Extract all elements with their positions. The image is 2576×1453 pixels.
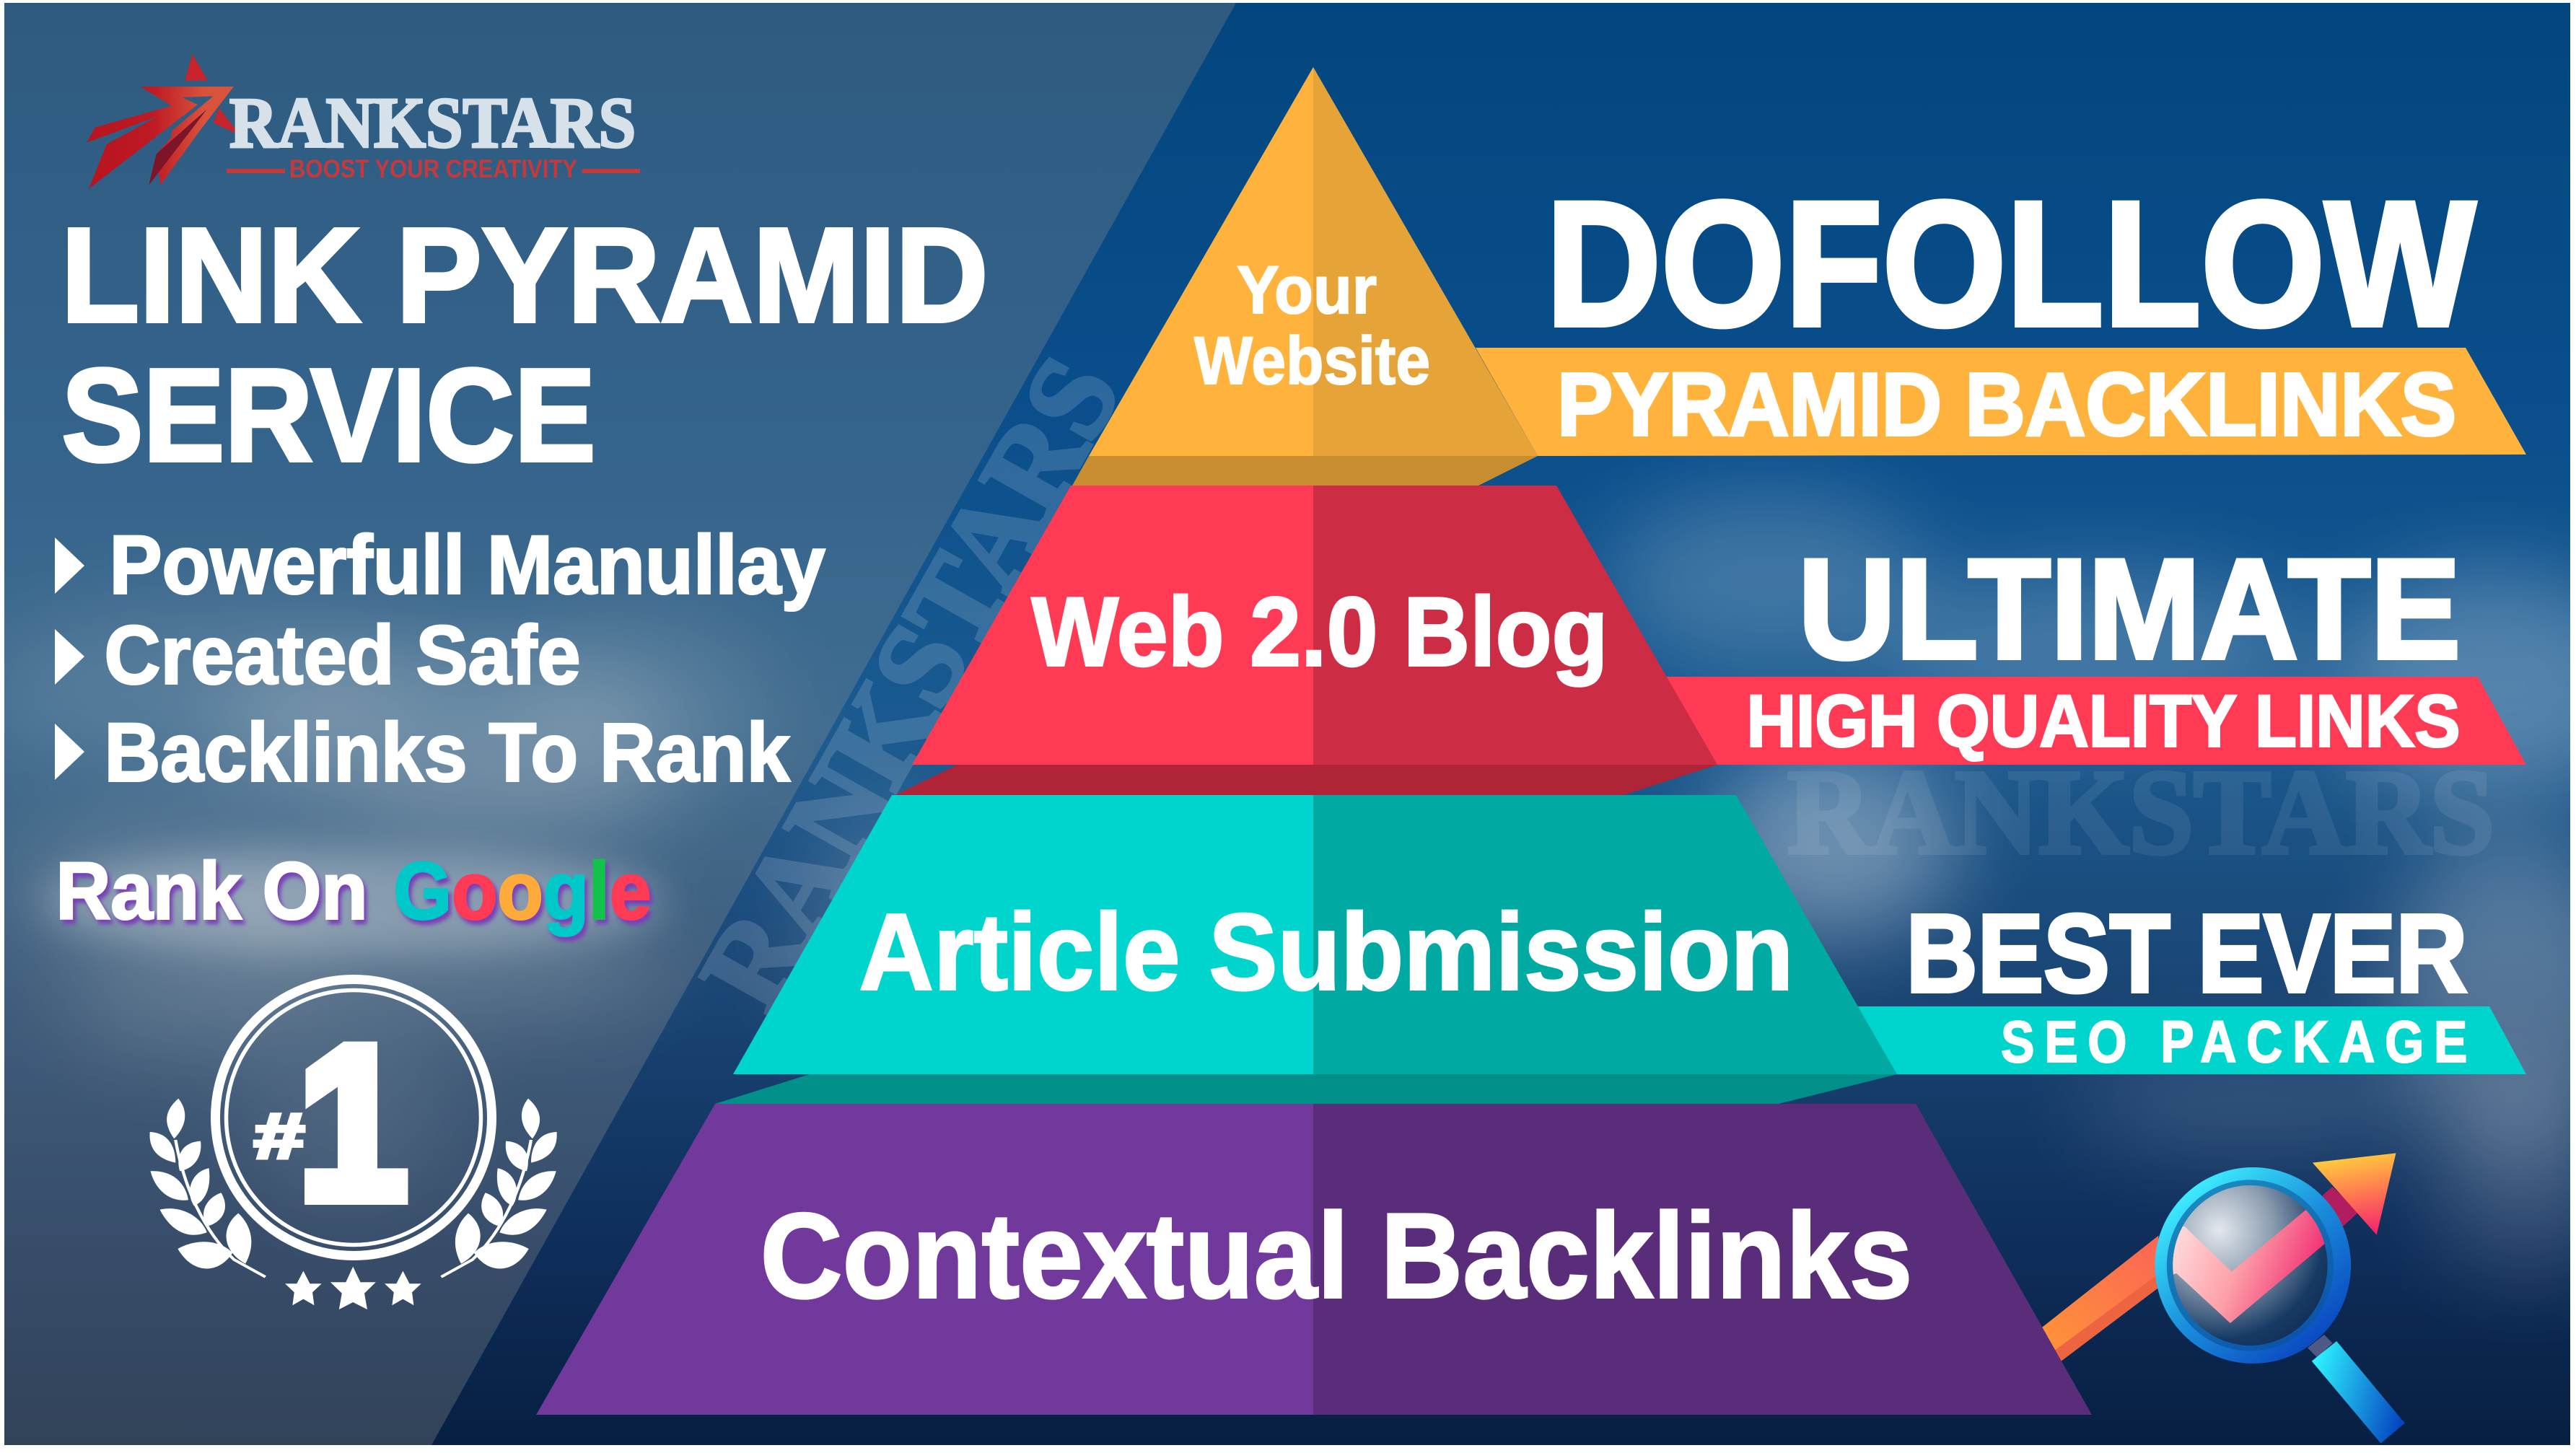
pyramid [536, 67, 2092, 1415]
tier 2: Web 2.0 Blog: Web 2.0 Blog [1032, 577, 1608, 687]
title: Link Pyramid Service: SERVICE [62, 341, 596, 489]
bullet: Created Safe: Created Safe [104, 609, 580, 701]
tier 1: Your Website: Your [1237, 252, 1377, 328]
magnifier inner ring [2167, 1180, 2334, 1351]
glow behind Rank On Google [43, 851, 664, 952]
bullet: Powerfull Manullay: Powerfull Manullay [110, 519, 825, 612]
badge number: 1 [299, 1001, 407, 1244]
laurel left [149, 1099, 266, 1277]
heading: Ultimate: ULTIMATE [1798, 530, 2461, 688]
tier 1: Your Website [1072, 67, 1538, 486]
ribbon: red [1665, 677, 2526, 765]
three stars [285, 1267, 421, 1309]
heading: Rank On Google: Rank On [56, 846, 368, 936]
heading: Rank On Google: Google [394, 846, 651, 936]
logo tagline: BOOST YOUR CREATIVITY [289, 155, 577, 183]
badge number: # [254, 1100, 305, 1172]
checkmark [2170, 1207, 2331, 1323]
badge rings [215, 980, 492, 1255]
arrow and magnifier icon [2042, 1153, 2405, 1444]
heading: Rank On Google [56, 846, 651, 936]
logo: Rankstars [87, 54, 640, 189]
arrow shaft [2042, 1187, 2359, 1361]
badge: #1 with laurel [149, 980, 557, 1309]
watermark: diagonal RANKSTARS: RANKSTARS [675, 336, 1146, 1030]
tier 4: Contextual Backlinks: Contextual Backlinks [761, 1188, 1912, 1323]
heading: Dofollow [1546, 164, 2475, 455]
heading: Ultimate [1746, 530, 2461, 762]
title: Link Pyramid Service [61, 201, 989, 489]
heading: Best Ever: BEST EVER [1906, 892, 2468, 1016]
tier 2: Web 2.0 Blog [895, 486, 1717, 795]
magnifier ring [2155, 1167, 2351, 1364]
laurel right [441, 1099, 557, 1277]
badge number [254, 1001, 407, 1244]
magnifier handle [2308, 1335, 2405, 1444]
tier 1: Your Website: Website [1194, 322, 1430, 398]
magnifier lens [2173, 1185, 2328, 1346]
ribbon: amber [1476, 348, 2526, 456]
icon: red star [87, 54, 240, 189]
heading: Best Ever [1906, 892, 2477, 1075]
label: Pyramid Backlinks: PYRAMID BACKLINKS [1557, 356, 2456, 455]
left translucent panel [4, 3, 1236, 1445]
watermark: horizontal RANKSTARS: RANKSTARS [1787, 745, 2494, 879]
bullet: Backlinks To Rank: Backlinks To Rank [104, 707, 790, 799]
ribbon: teal [1857, 1006, 2526, 1074]
arrow head [2313, 1153, 2396, 1235]
label: High Quality Links: HIGH QUALITY LINKS [1746, 680, 2461, 762]
title: Link Pyramid Service: LINK PYRAMID [61, 201, 989, 351]
label: SEO Package: SEO PACKAGE [2001, 1009, 2477, 1075]
tier 4: Contextual Backlinks [536, 1104, 2092, 1415]
heading: Dofollow: DOFOLLOW [1546, 164, 2475, 364]
tier 3: Article Submission: Article Submission [859, 890, 1794, 1013]
tier 3: Article Submission [715, 795, 1897, 1104]
logo wordmark: RANKSTARS [229, 82, 636, 163]
bullet list [55, 519, 825, 799]
